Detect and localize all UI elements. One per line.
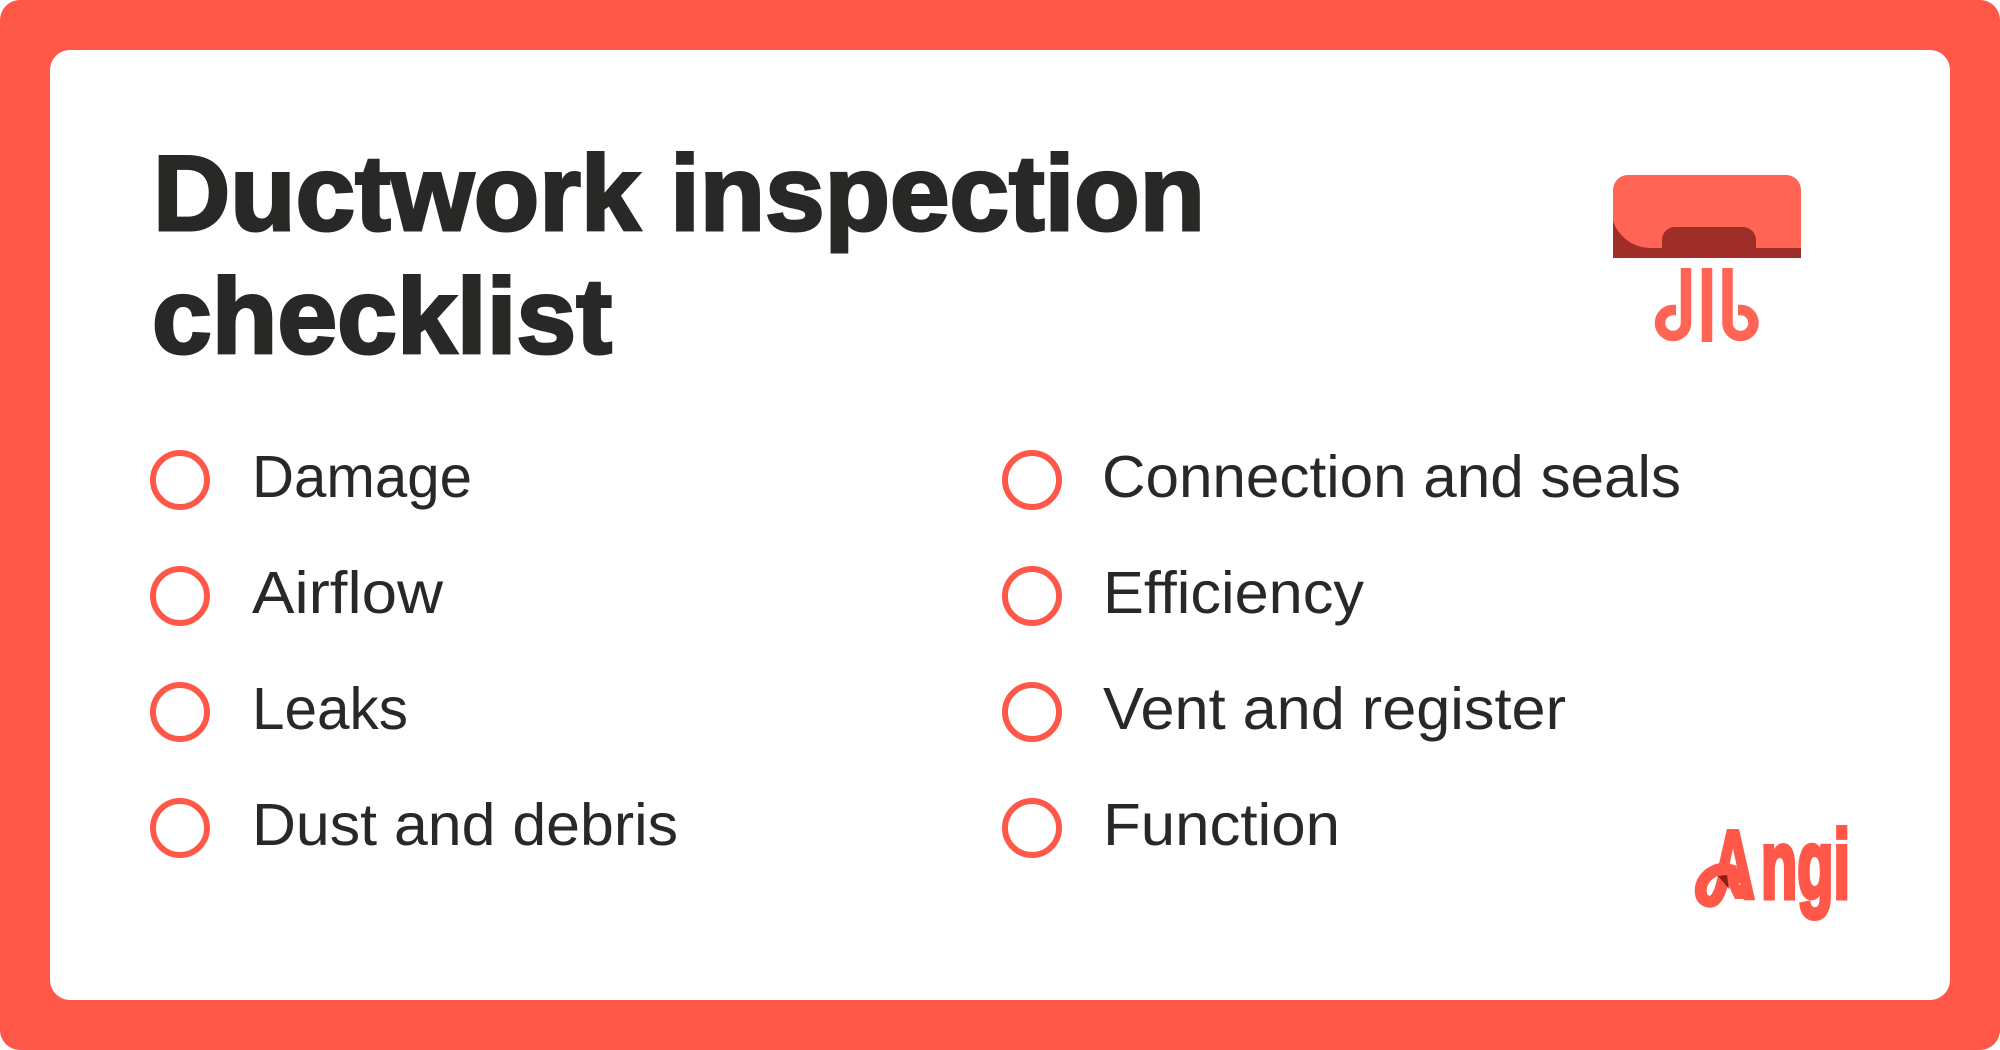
logo: Angi: ngi bbox=[1761, 810, 1850, 919]
item: Function bbox=[1005, 792, 1340, 858]
checklist: right column bbox=[1005, 444, 1681, 858]
item: Damage bbox=[153, 444, 472, 510]
title bbox=[152, 133, 1205, 376]
item: Leaks bbox=[153, 676, 408, 742]
title: Ductwork inspection bbox=[153, 133, 1205, 253]
logo: Angi: A bbox=[1711, 810, 1755, 919]
logo: Angi bbox=[1701, 810, 1850, 919]
item: Vent and register: Vent and register bbox=[1103, 676, 1566, 742]
item: Leaks: Leaks bbox=[252, 676, 408, 742]
item: Dust and debris: Dust and debris bbox=[252, 792, 678, 858]
item: Efficiency: Efficiency bbox=[1103, 560, 1365, 626]
item: Damage: Damage bbox=[252, 444, 472, 510]
title: checklist bbox=[152, 256, 612, 376]
icon: air vent with airflow bbox=[1613, 175, 1801, 342]
item: Connection and seals: Connection and seals bbox=[1102, 444, 1681, 510]
item: Efficiency bbox=[1005, 560, 1365, 626]
item: Function: Function bbox=[1103, 792, 1340, 858]
item: Airflow bbox=[153, 560, 443, 626]
checklist: left column bbox=[153, 444, 678, 858]
item: Airflow: Airflow bbox=[252, 560, 443, 626]
